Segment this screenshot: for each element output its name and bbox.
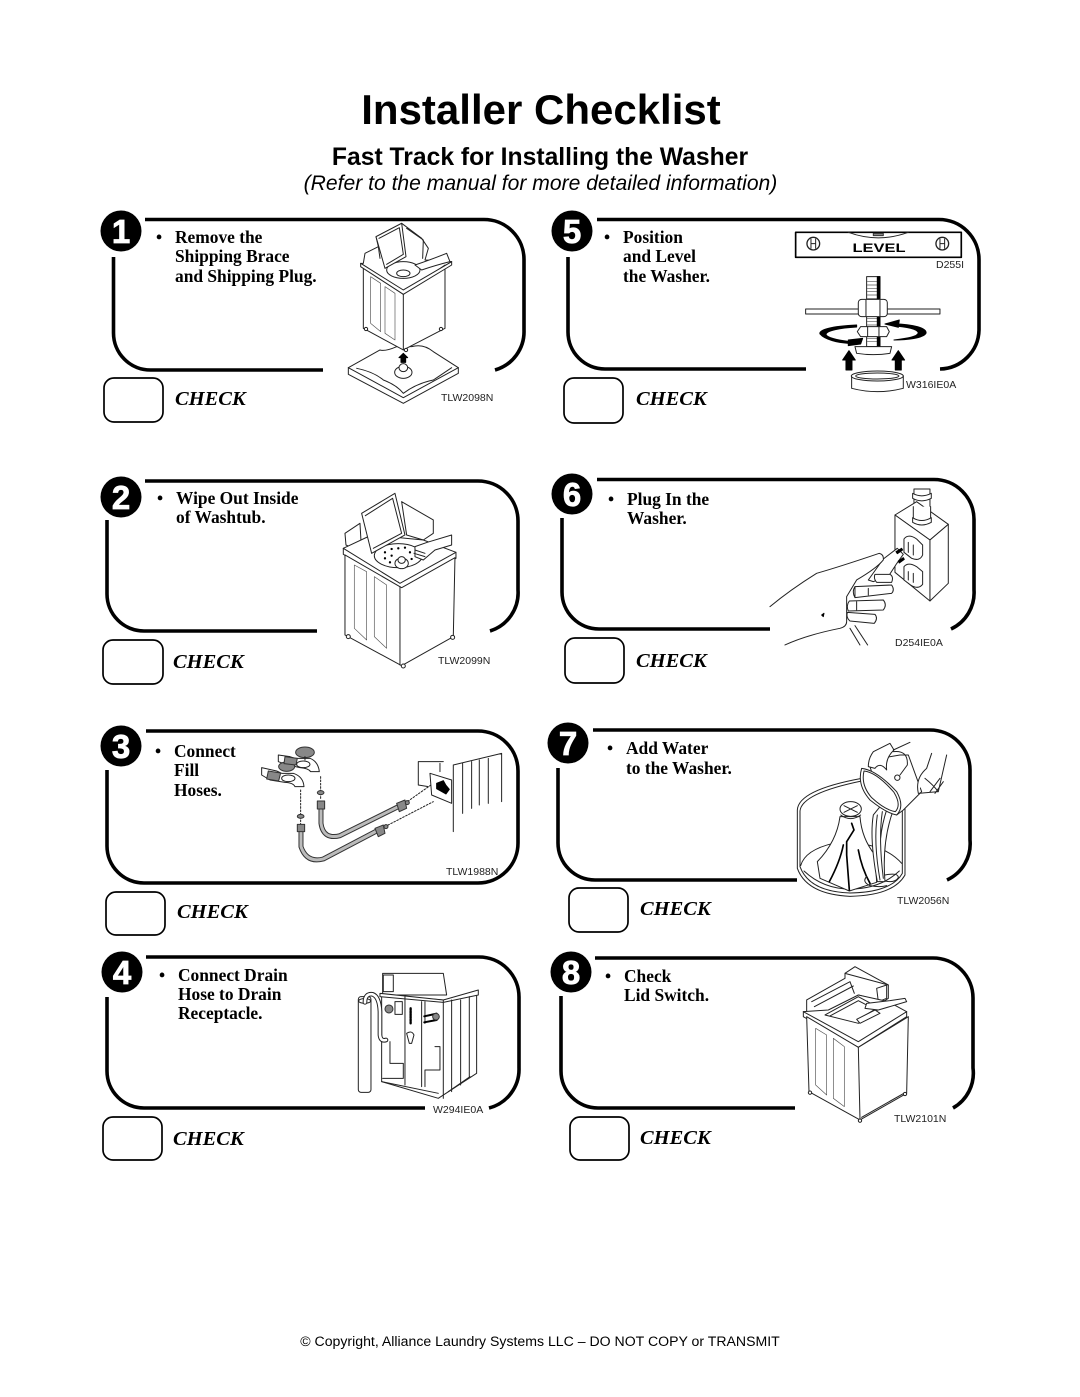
panel: step 6 plug in washer (552, 474, 974, 683)
instruction text: and Level (623, 246, 696, 266)
instruction text: • (159, 965, 165, 985)
figure code: W294IE0A (433, 1104, 483, 1116)
instruction text: • (604, 227, 610, 247)
instruction text: Hose to Drain (178, 984, 282, 1004)
illustration: hand plugging into outlet (770, 489, 948, 645)
badge: 7: 7 (559, 725, 577, 762)
checkbox (106, 892, 165, 935)
badge: 8: 8 (562, 954, 580, 991)
checkbox (103, 1117, 162, 1160)
badge: 7 (548, 722, 588, 764)
frame (107, 731, 518, 883)
instruction text: • (608, 489, 614, 509)
instruction text: • (607, 738, 613, 758)
check label: CHECK (173, 651, 245, 673)
figure code: TLW2101N (894, 1113, 946, 1125)
instruction text: Wipe Out Inside (176, 488, 299, 508)
figure code: D254IE0A (895, 637, 943, 649)
check label: CHECK (640, 1127, 712, 1149)
badge: 5: 5 (563, 213, 581, 250)
check label: CHECK (173, 1128, 245, 1150)
instruction text: • (156, 227, 162, 247)
instruction text: Remove the (175, 227, 263, 247)
instruction text: Plug In the (627, 489, 709, 509)
instruction text: Lid Switch. (624, 985, 709, 1005)
instruction text: • (155, 741, 161, 761)
illustration: faucets and fill hoses (262, 747, 502, 860)
instruction text: to the Washer. (626, 758, 732, 778)
figure code: TLW2056N (897, 895, 949, 907)
instruction text: Position (623, 227, 683, 247)
check label: CHECK (175, 388, 247, 410)
frame (107, 957, 519, 1108)
badge: 3 (100, 726, 142, 766)
badge: 4 (102, 952, 142, 992)
level wording: LEVEL (852, 241, 906, 255)
badge: 6: 6 (563, 476, 581, 513)
checkbox (564, 378, 623, 423)
checkbox (569, 888, 628, 932)
checkbox (104, 378, 163, 422)
instruction text: Receptacle. (178, 1003, 262, 1023)
illustration: pouring water into tub (797, 742, 947, 896)
illustration: washer rear with drain hose (358, 973, 478, 1098)
panel: step 8 check lid switch (550, 952, 973, 1160)
badge: 1 (100, 210, 142, 252)
panel: step 4 connect drain hose (102, 952, 519, 1160)
figure code: W316IE0A (906, 379, 956, 391)
panel: step 3 connect fill hoses (100, 726, 518, 935)
instruction text: the Washer. (623, 266, 710, 286)
instruction text: Fill (174, 760, 199, 780)
subtitle: Fast Track for Installing the Washer (332, 144, 748, 171)
illustration: washer on shipping tray (348, 223, 458, 403)
frame (568, 220, 979, 369)
badge: 2: 2 (112, 479, 130, 516)
note: refer to manual: (Refer to the manual for more detailed information) (304, 172, 777, 195)
instruction text: Hoses. (174, 780, 222, 800)
check label: CHECK (177, 901, 249, 923)
badge: 6 (552, 474, 592, 514)
panel: step 5 position and level (552, 210, 979, 423)
checkbox (565, 638, 624, 683)
panel: step 2 wipe out washtub (100, 476, 518, 684)
frame (561, 958, 973, 1108)
figure code: D255I (936, 259, 964, 271)
illustration: leveling leg (806, 277, 940, 392)
badge: 3: 3 (112, 728, 130, 765)
instruction text: of Washtub. (176, 507, 266, 527)
instruction text: • (157, 488, 163, 508)
badge: 4: 4 (113, 954, 132, 991)
checkbox (570, 1117, 629, 1160)
frame (114, 220, 524, 370)
badge: 8 (550, 952, 592, 992)
check label: CHECK (640, 898, 712, 920)
check label: CHECK (636, 388, 708, 410)
instruction text: Washer. (627, 508, 687, 528)
badge: 2 (100, 476, 142, 518)
frame (562, 480, 974, 629)
figure code: TLW2098N (441, 392, 493, 404)
instruction text: Connect (174, 741, 236, 761)
frame (107, 481, 518, 631)
figure code: TLW1988N (446, 866, 498, 878)
illustration: spirit level (796, 232, 961, 257)
checkbox (103, 640, 163, 684)
instruction text: Check (624, 966, 672, 986)
instruction text: • (605, 966, 611, 986)
panel: step 1 remove shipping brace (100, 210, 524, 422)
figure code: TLW2099N (438, 655, 490, 667)
illustration: washer with open lid (343, 493, 456, 668)
frame (558, 730, 970, 880)
title: Installer Checklist (361, 86, 721, 133)
instruction text: Shipping Brace (175, 246, 290, 266)
panel: step 7 add water (548, 722, 970, 932)
instruction text: and Shipping Plug. (175, 266, 317, 286)
illustration: washer with closed lid (803, 967, 908, 1122)
badge: 1: 1 (112, 213, 130, 250)
instruction text: Connect Drain (178, 965, 288, 985)
copyright footer: © Copyright, Alliance Laundry Systems LLC – DO NOT COPY or TRANSMIT (300, 1333, 780, 1349)
instruction text: Add Water (626, 738, 709, 758)
check label: CHECK (636, 650, 708, 672)
badge: 5 (552, 210, 592, 252)
